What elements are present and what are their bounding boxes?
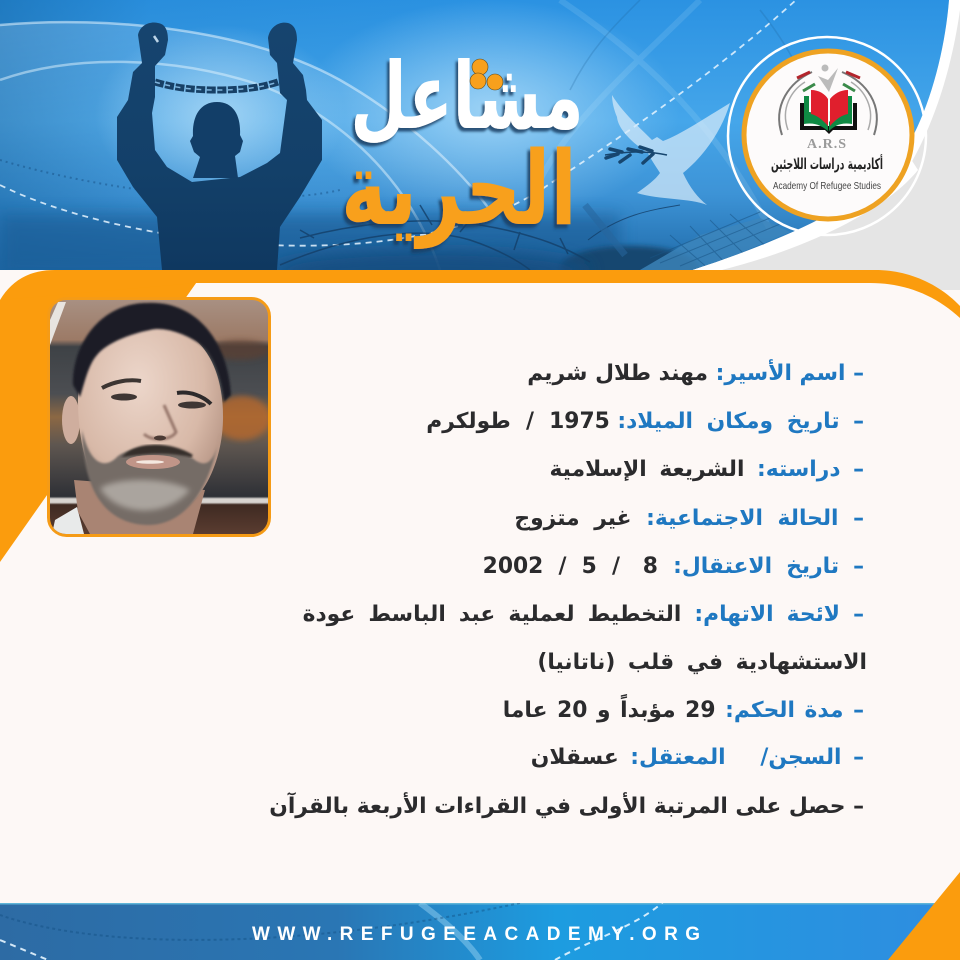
text: marital status: – الحالة الاجتماعية: غير متزوج — [514, 506, 864, 531]
orange frame band — [0, 270, 960, 340]
title: الحرية: الحرية — [341, 130, 577, 249]
text: achievement: – حصل على المرتبة الأولى في القراءات الأربعة بالقرآن — [269, 794, 864, 819]
title dots accent — [470, 59, 503, 90]
footer band — [0, 900, 960, 960]
text: arrest date: – تاريخ الاعتقال: 8 / 5 / 2002 — [483, 554, 864, 579]
website url: WWW.REFUGEEACADEMY.ORG — [252, 924, 700, 945]
icon: book emblem — [779, 64, 877, 135]
orange left wedge — [0, 283, 196, 562]
beard — [82, 430, 220, 525]
text: English academy name: Academy Of Refugee Studies — [773, 180, 881, 192]
barbed wire — [280, 0, 840, 270]
title: مشاعل: مشاعل — [350, 42, 584, 150]
portrait photo — [48, 298, 270, 536]
text: A.R.S: A.R.S — [807, 137, 847, 152]
nose — [144, 405, 176, 439]
text: prison: – السجن/ المعتقل: عسقلان — [531, 745, 864, 770]
orange corner triangle — [888, 872, 960, 960]
text: charges continued: الاستشهادية في قلب (ناتانيا) — [537, 650, 867, 675]
eyes and brows — [102, 380, 141, 388]
icon: dove with olive branch — [605, 95, 730, 205]
logo badge — [728, 37, 926, 235]
shirt — [52, 507, 84, 534]
header banner photo — [0, 0, 960, 290]
dark horizon clouds — [0, 204, 789, 270]
ear — [62, 396, 80, 444]
text: birth date and place: – تاريخ ومكان الميلاد: 1975 / طولكرم — [426, 409, 864, 434]
hair — [73, 303, 231, 402]
neck — [74, 480, 205, 534]
text: sentence: – مدة الحكم: 29 مؤبداً و 20 عاما — [503, 698, 864, 723]
text: prisoner name: – اسم الأسير: مهند طلال شريم — [527, 361, 864, 386]
text: Arabic academy name: أكاديمية دراسات اللاجئين — [771, 154, 883, 173]
text: charges: – لائحة الاتهام: التخطيط لعملية عبد الباسط عودة — [303, 602, 864, 627]
white content panel — [0, 283, 960, 903]
grey corner background — [600, 0, 960, 290]
moustache and mouth — [126, 446, 192, 456]
icon: silhouette of prisoner with chained raised hands — [117, 22, 322, 270]
dashed flight path — [0, 0, 796, 246]
text: studies: – دراسته: الشريعة الإسلامية — [549, 457, 864, 482]
fence — [650, 212, 780, 270]
face — [78, 328, 223, 494]
